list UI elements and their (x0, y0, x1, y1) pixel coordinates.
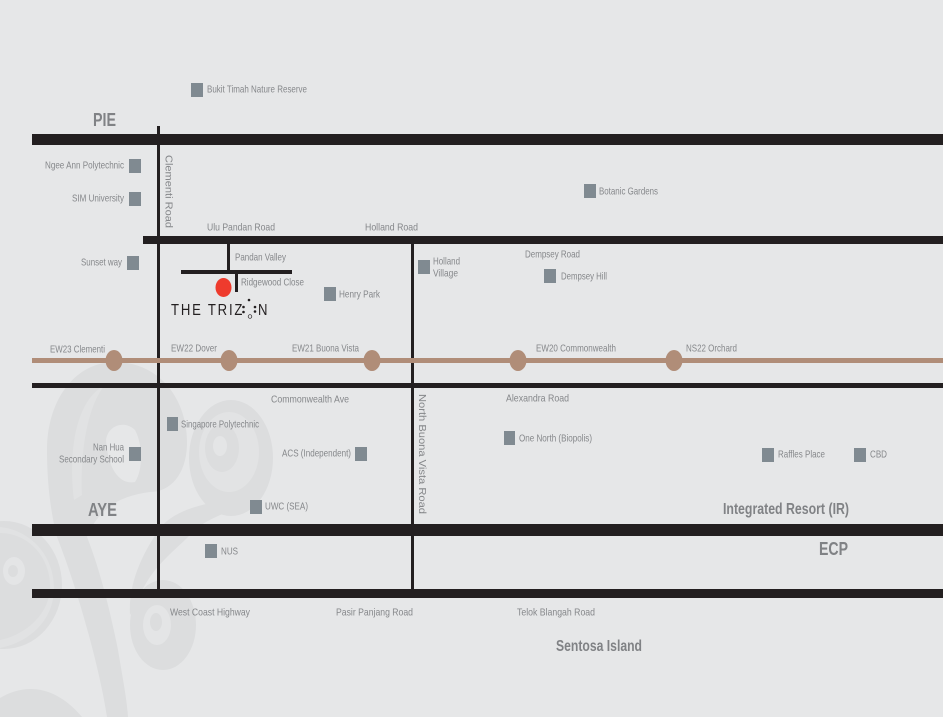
road labels: Clementi Road (162, 155, 174, 228)
road labels: Pandan Valley (235, 251, 287, 263)
landmark: NUS (205, 544, 238, 558)
road: Commonwealth Ave (32, 383, 943, 388)
landmark: One North (Biopolis) (504, 431, 592, 445)
expressway and place headings: PIE (93, 110, 116, 130)
landmark: Nan Hua Secondary School: Secondary School (59, 453, 124, 465)
road labels: Commonwealth Ave (271, 393, 349, 405)
road labels: Ridgewood Close (241, 276, 304, 288)
road: West Coast Highway (32, 589, 943, 598)
landmark: Holland Village: Village (433, 267, 458, 279)
landmark: ACS (Independent): ACS (Independent) (282, 447, 351, 459)
landmark: Bukit Timah Nature Reserve (191, 83, 307, 97)
logo: The Trizon (171, 299, 267, 319)
landmark: UWC (SEA) (250, 500, 308, 514)
landmark: CBD (854, 448, 887, 462)
MRT station labels (50, 342, 737, 355)
landmark: Bukit Timah Nature Reserve: Bukit Timah Nature Reserve (207, 83, 307, 95)
landmark: SIM University: SIM University (72, 192, 125, 204)
landmark: UWC (SEA): UWC (SEA) (265, 500, 308, 512)
road labels: Holland Road (365, 221, 418, 233)
logo: The Trizon: THE TRIZ (171, 302, 244, 319)
road: Ridgewood Close vertical (235, 273, 238, 292)
road labels: Telok Blangah Road (517, 606, 595, 618)
landmark: Botanic Gardens: Botanic Gardens (599, 185, 658, 197)
road labels: Pasir Panjang Road (336, 606, 413, 618)
road labels: North Buona Vista Road (416, 394, 428, 514)
road: PIE (32, 134, 943, 145)
logo: The Trizon: N (258, 302, 267, 319)
landmark: NUS: NUS (221, 545, 238, 557)
expressway and place headings (88, 110, 849, 655)
landmark: Nan Hua Secondary School (59, 441, 141, 465)
decorative swirl pattern (0, 362, 273, 717)
landmark: Ngee Ann Polytechnic: Ngee Ann Polytechnic (45, 159, 124, 171)
landmark: One North (Biopolis): One North (Biopolis) (519, 432, 592, 444)
road labels: Dempsey Road (525, 248, 580, 260)
landmark: Raffles Place (762, 448, 825, 462)
MRT station labels: NS22 Orchard (686, 342, 737, 354)
road: Pandan Valley (227, 244, 230, 271)
MRT line with stations (32, 350, 943, 371)
road labels: West Coast Highway (170, 606, 251, 618)
landmark: Singapore Polytechnic: Singapore Polytechnic (181, 418, 259, 430)
landmark: Dempsey Hill: Dempsey Hill (561, 270, 607, 282)
road: Ulu Pandan Road (143, 236, 943, 244)
road labels: Alexandra Road (506, 392, 569, 404)
landmark: Dempsey Hill (544, 269, 607, 283)
landmark: CBD: CBD (870, 448, 887, 460)
road labels: Ulu Pandan Road (207, 221, 275, 233)
landmark: Nan Hua Secondary School: Nan Hua (93, 441, 124, 453)
road: AYE (32, 524, 943, 536)
landmark: Raffles Place: Raffles Place (778, 448, 825, 460)
landmark: Botanic Gardens (584, 184, 658, 198)
road: Clementi Road (157, 126, 160, 591)
expressway and place headings: Integrated Resort (IR) (723, 501, 849, 518)
landmark: Henry Park (324, 287, 381, 301)
landmark: Holland Village: Holland (433, 255, 460, 267)
road: North Buona Vista Road (411, 244, 414, 591)
landmark: Henry Park: Henry Park (339, 288, 381, 300)
road labels (162, 155, 595, 618)
expressway and place headings: Sentosa Island (556, 638, 642, 655)
expressway and place headings: ECP (819, 539, 848, 559)
MRT station labels: EW20 Commonwealth (536, 342, 616, 354)
MRT station labels: EW23 Clementi (50, 343, 105, 355)
landmark: Holland Village (418, 255, 460, 279)
MRT station labels: EW22 Dover (171, 342, 217, 354)
landmark: Sunset way: Sunset way (81, 256, 123, 268)
MRT station labels: EW21 Buona Vista (292, 342, 359, 354)
expressway and place headings: AYE (88, 500, 117, 520)
location marker: The Trizon (216, 278, 232, 297)
landmark: Singapore Polytechnic (167, 417, 259, 431)
road: Ridgewood Close horizontal (181, 270, 292, 274)
